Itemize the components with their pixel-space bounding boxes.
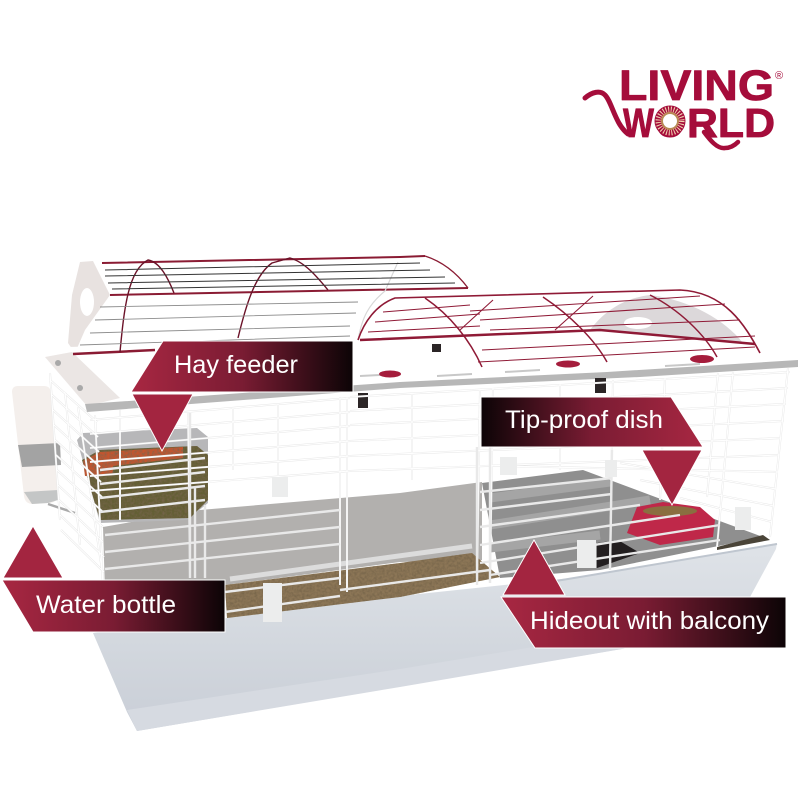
hideout platform	[482, 470, 763, 578]
lid leg right	[595, 378, 606, 393]
left roof end panel	[68, 261, 110, 353]
pointer	[503, 540, 565, 595]
hideout opening	[597, 540, 640, 568]
lid top	[45, 338, 798, 404]
bedding	[225, 553, 500, 618]
lid leg left	[358, 393, 368, 408]
rear wall	[103, 482, 482, 592]
shelf rail	[230, 546, 472, 579]
lid front strip	[85, 360, 798, 412]
banner	[2, 580, 225, 632]
callout: Hay feeder	[131, 341, 353, 451]
logo: Living World	[585, 62, 783, 148]
logo: Living World: ®	[775, 70, 783, 82]
lid leg rear	[432, 344, 441, 352]
platform dark corner	[717, 535, 770, 550]
right roof end panel	[590, 295, 743, 343]
tray right rim	[520, 544, 777, 587]
red knob right	[690, 355, 714, 363]
banner	[501, 597, 786, 648]
pointer	[642, 450, 702, 505]
label: Tip-proof dish	[505, 406, 663, 434]
front door panel wires	[100, 413, 720, 612]
red knob left	[379, 370, 401, 378]
water bottle	[12, 386, 75, 513]
logo: Living World: RLD	[687, 100, 775, 146]
right roof panel cutout	[624, 317, 652, 329]
red knob middle	[556, 360, 580, 368]
left lid corner	[45, 352, 120, 406]
left roof cutout	[80, 288, 94, 316]
side and front wires, halo	[50, 368, 790, 630]
tip-proof dish	[627, 502, 715, 545]
plastic tray	[93, 543, 777, 731]
label: Hideout with balcony	[530, 607, 770, 635]
callout: Tip-proof dish	[481, 397, 703, 505]
logo: Living World: LIVING	[619, 62, 774, 110]
platform light bands	[490, 482, 650, 548]
banner	[481, 397, 703, 447]
label: Hay feeder	[174, 351, 298, 379]
logo: Living World: W	[623, 100, 654, 146]
front clips	[263, 457, 751, 622]
pointer	[3, 526, 63, 578]
pointer	[132, 394, 193, 451]
lid slots	[360, 364, 700, 376]
lid screws	[55, 360, 83, 391]
tray lower lip	[127, 612, 745, 731]
logo: Living World: O	[655, 100, 685, 146]
callout: Water bottle	[2, 526, 225, 632]
right roof	[358, 290, 760, 367]
cage	[12, 256, 798, 731]
callout: Hideout with balcony	[501, 540, 786, 648]
hay feeder	[77, 428, 208, 523]
label: Water bottle	[36, 591, 176, 619]
side and front wires, white	[50, 368, 790, 630]
left roof	[73, 256, 468, 354]
banner	[131, 341, 353, 392]
